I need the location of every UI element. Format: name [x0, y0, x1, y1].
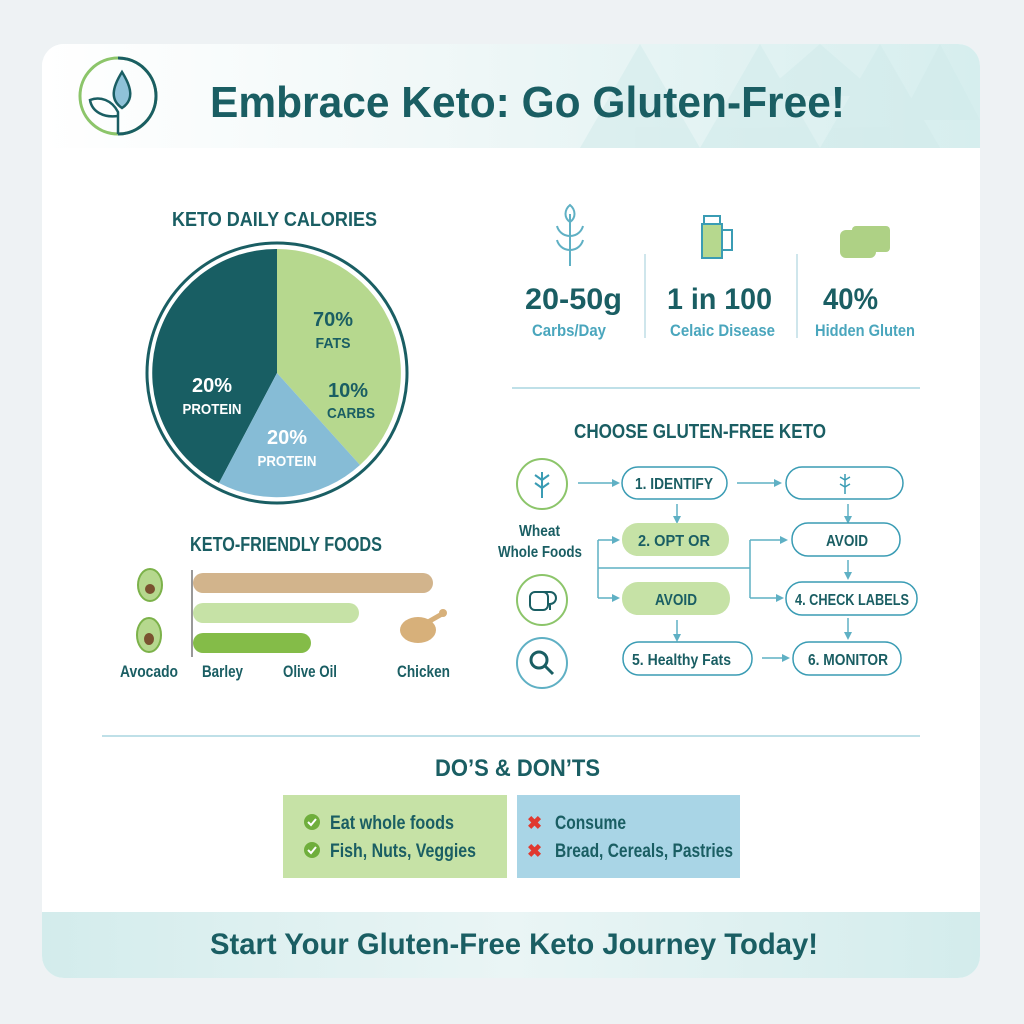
- stats row: 1 in 100: [667, 283, 772, 316]
- panel: do's: Eat whole foods: [330, 813, 454, 834]
- heading: keto daily calories: KETO DAILY CALORIES: [172, 209, 377, 231]
- panel: don'ts: Bread, Cereals, Pastries: [555, 841, 733, 862]
- icon: logo leaf and drop: [80, 58, 156, 134]
- stats row: 20-50g: [525, 283, 622, 316]
- icon: pitcher: [702, 216, 732, 258]
- pie chart: 10%: [328, 380, 368, 402]
- node: avoid left: AVOID: [655, 592, 697, 609]
- flowchart: Wheat: [519, 523, 561, 540]
- panel: don'ts: ✖: [527, 841, 542, 861]
- node: healthy fats: 5. Healthy Fats: [632, 652, 731, 669]
- icon: wheat circle: [517, 459, 567, 509]
- stats row: Celaic Disease: [670, 321, 775, 340]
- stats row: Carbs/Day: [532, 321, 606, 340]
- node: wheat: [786, 467, 903, 499]
- node: avoid right: AVOID: [826, 533, 868, 550]
- node: monitor: 6. MONITOR: [808, 652, 888, 669]
- pie chart: [147, 243, 407, 503]
- node: check labels: [786, 582, 917, 615]
- stats row: [525, 205, 915, 340]
- pie chart: 20%: [267, 427, 307, 449]
- node: identify: 1. IDENTIFY: [635, 476, 713, 493]
- node: opt or: 2. OPT OR: [638, 533, 710, 550]
- node: opt or: [622, 523, 729, 556]
- heading: do's and don'ts: DO’S & DON’TS: [435, 755, 600, 782]
- title: Embrace Keto: Go Gluten-Free!: [210, 78, 845, 127]
- heading: keto-friendly foods: KETO-FRIENDLY FOODS: [190, 534, 382, 556]
- stats row: Hidden Gluten: [815, 321, 915, 340]
- bar chart: foods: Avocado: [120, 662, 178, 681]
- panel: don'ts: Consume: [555, 813, 626, 834]
- panel: do's: [283, 795, 507, 878]
- icon: bread: [840, 226, 890, 258]
- node: avoid left: [622, 582, 730, 615]
- heading: choose gluten-free keto: CHOOSE GLUTEN-FREE KETO: [574, 421, 826, 443]
- node: avoid right: [792, 523, 900, 556]
- bar chart: foods: Olive Oil: [283, 662, 337, 681]
- bar chart: foods: Chicken: [397, 662, 450, 681]
- node: monitor: [793, 642, 901, 675]
- panel: do's: Fish, Nuts, Veggies: [330, 841, 476, 862]
- icon: magnifier circle: [517, 638, 567, 688]
- flowchart: Whole Foods: [498, 544, 582, 561]
- icon: avocados: [137, 569, 162, 652]
- footer banner: Start Your Gluten-Free Keto Journey Today!: [210, 928, 818, 961]
- flowchart: [498, 459, 917, 688]
- pie chart: CARBS: [327, 405, 375, 422]
- icon: bread circle: [517, 575, 567, 625]
- stats row: 40%: [823, 283, 878, 316]
- icon: chicken: [400, 609, 447, 643]
- panel: don'ts: [517, 795, 740, 878]
- pie chart: 20%: [192, 375, 232, 397]
- node: identify: [622, 467, 727, 499]
- node: healthy fats: [623, 642, 752, 675]
- bar chart: foods: [120, 570, 450, 681]
- bar chart: foods: Barley: [202, 662, 243, 681]
- icon: wheat: [557, 205, 583, 266]
- pie chart: PROTEIN: [258, 453, 316, 470]
- node: check labels: 4. CHECK LABELS: [795, 592, 909, 609]
- panel: don'ts: ✖: [527, 813, 542, 833]
- pie chart: 70%: [313, 309, 353, 331]
- pie chart: PROTEIN: [182, 401, 242, 418]
- pie chart: FATS: [316, 335, 350, 352]
